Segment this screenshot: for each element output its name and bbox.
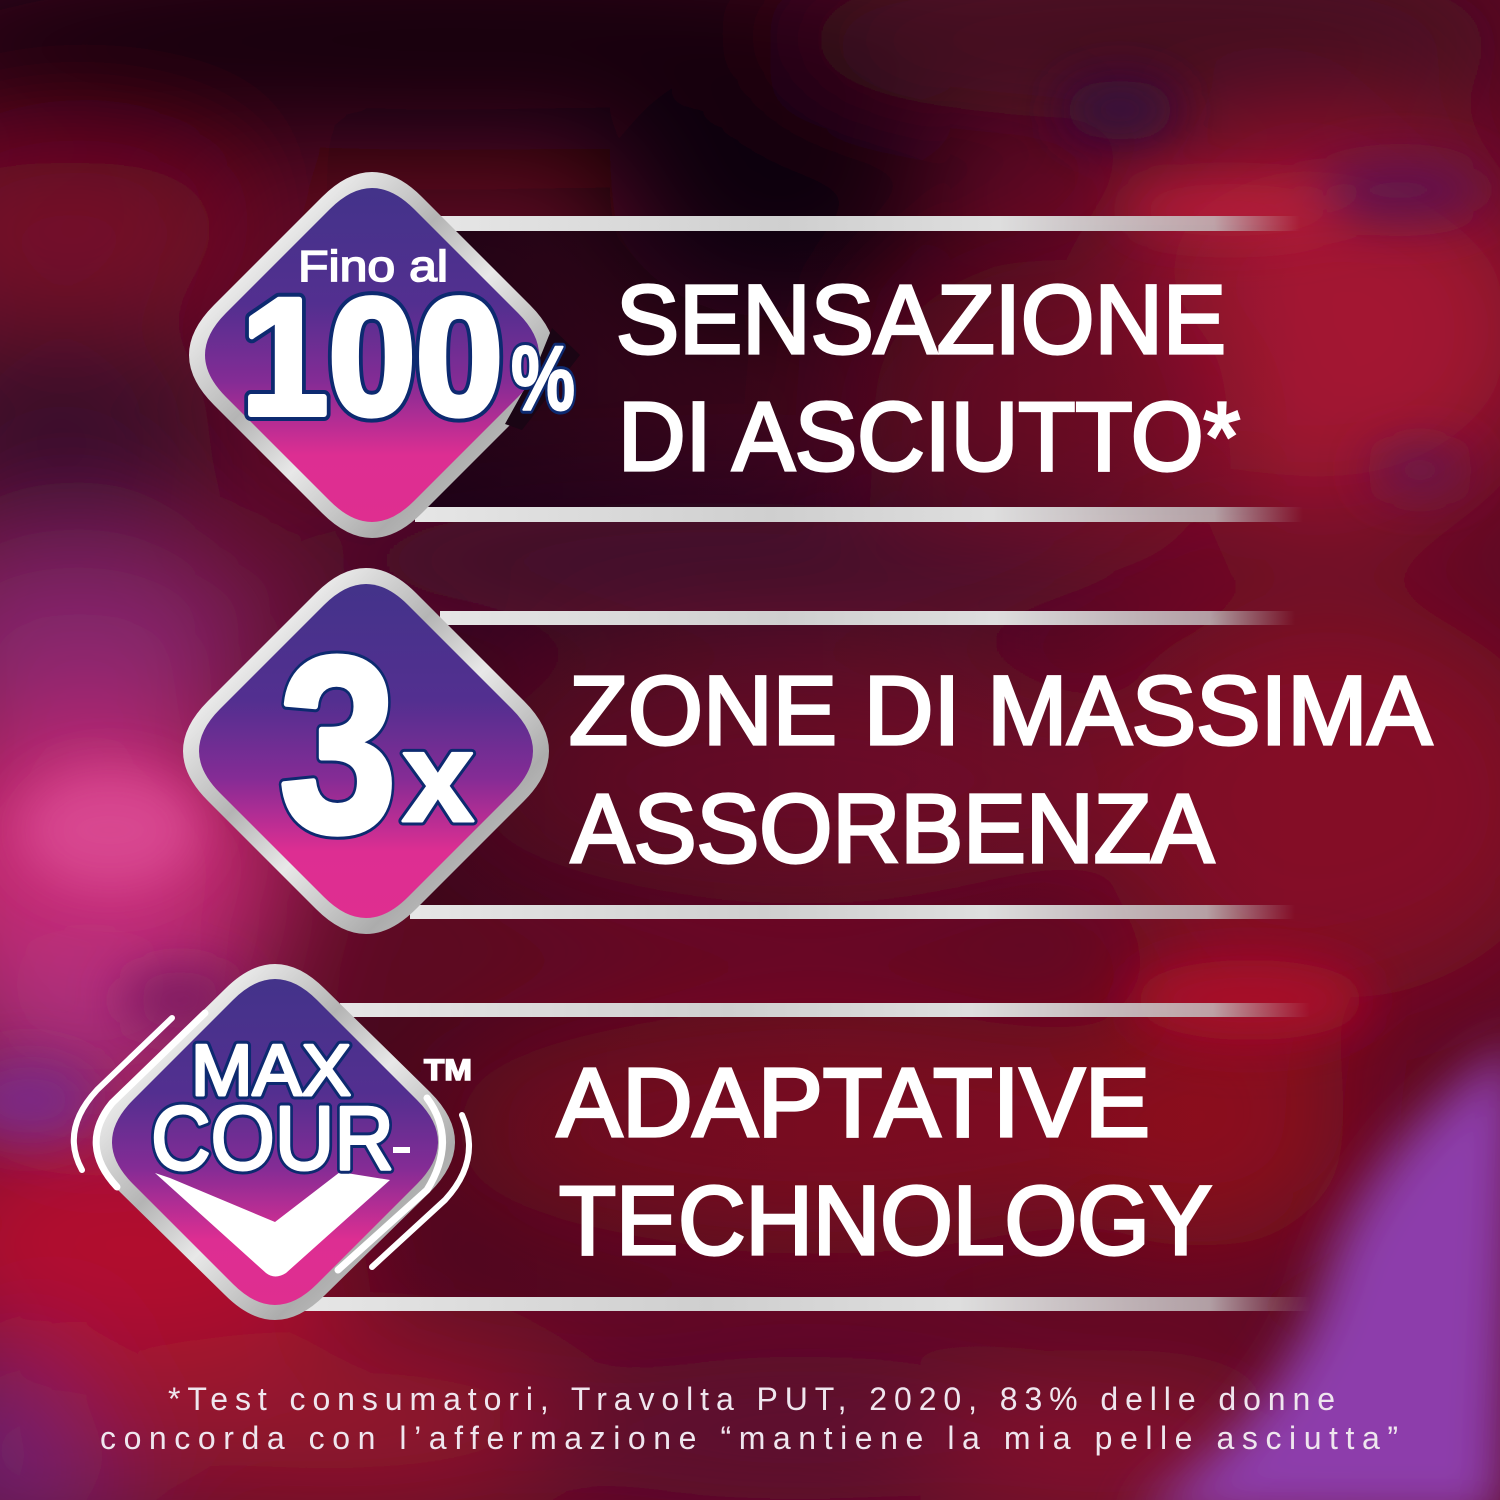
heading: zone di massima assorbenza (569, 656, 1432, 883)
logo hyphen (393, 1147, 410, 1153)
purple to pink diamond (199, 584, 533, 918)
trademark: TM (424, 1054, 472, 1087)
logo text: COUR: COUR (151, 1089, 394, 1189)
label: Fino al: Fino al (298, 242, 448, 291)
number: 3: 3 (279, 605, 397, 884)
panel: dark shading behind first row (420, 225, 1300, 515)
panel: dark shading behind second row (420, 620, 1295, 910)
badge: max cour-v (74, 964, 472, 1320)
letter: x: x (402, 706, 474, 849)
panel: dark shading behind third row (320, 1012, 1310, 1302)
number: 100: 100 (241, 265, 503, 450)
silver diamond frame (183, 568, 549, 934)
gap in frame behind percent sign (505, 328, 580, 430)
silver diamond frame (189, 172, 555, 538)
white motion swooshes (74, 1013, 469, 1270)
heading: adaptative technology (557, 1048, 1212, 1275)
heading: sensazione di asciutto: SENSAZIONE (616, 265, 1226, 374)
number: 3: 3 (279, 605, 397, 884)
heading: zone di massima assorbenza: ASSORBENZA (571, 774, 1214, 883)
heading: sensazione di asciutto (616, 265, 1240, 491)
heading: adaptative technology: ADAPTATIVE (557, 1048, 1150, 1157)
logo text: MAX: MAX (191, 1031, 351, 1111)
heading: adaptative technology: TECHNOLOGY (559, 1166, 1212, 1275)
badge: fino al 100% (189, 172, 580, 538)
percent sign: % (511, 328, 575, 430)
silver bars: first row (415, 216, 1303, 522)
footnote (100, 1381, 1398, 1456)
number: 100: 100 (241, 265, 503, 450)
letter: x: x (402, 706, 474, 849)
footnote: *Test consumatori, Travolta PUT, 2020, 83% delle donne (168, 1381, 1335, 1417)
silver bars: third row (305, 1003, 1310, 1311)
percent sign: % (511, 328, 575, 430)
heading: sensazione di asciutto: DI ASCIUTTO* (618, 382, 1240, 491)
purple to pink diamond (205, 188, 539, 522)
footnote: concorda con l’affermazione “mantiene la mia pelle asciutta” (100, 1420, 1398, 1456)
logo text: COUR: COUR (151, 1089, 394, 1189)
heading: zone di massima assorbenza: ZONE DI MASSIMA (569, 656, 1432, 765)
silver diamond frame (95, 964, 455, 1320)
badge: 3x (183, 568, 549, 934)
white V shape (155, 1172, 390, 1276)
logo text: MAX: MAX (191, 1031, 351, 1111)
silver bars: second row (410, 611, 1295, 919)
purple to pink diamond (112, 979, 438, 1305)
